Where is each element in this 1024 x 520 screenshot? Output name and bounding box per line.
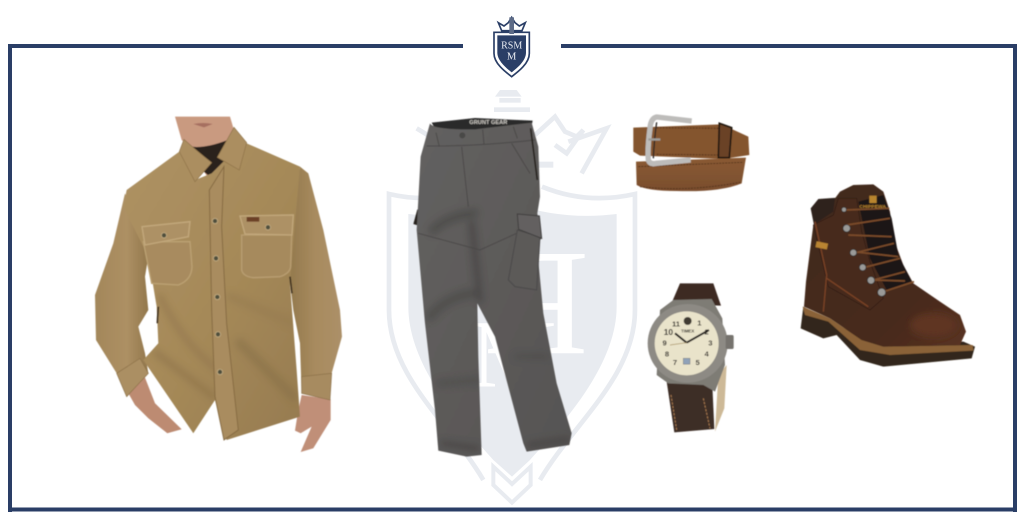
pants silhouette	[417, 123, 572, 457]
neck and chin	[175, 117, 237, 178]
dial	[655, 311, 719, 375]
collar right	[217, 127, 247, 170]
arm shadow lines	[157, 277, 292, 323]
right sleeve	[289, 167, 342, 400]
watermark tip chevron	[493, 467, 531, 503]
boot welt	[803, 307, 973, 355]
pants inner waistband	[432, 118, 533, 132]
buttons	[161, 218, 271, 375]
dial text and numbers: 8	[665, 350, 670, 359]
collar shadow	[187, 137, 237, 178]
dial text and numbers: 10	[664, 327, 673, 337]
right chest pocket	[242, 235, 292, 278]
boot sole	[801, 307, 975, 367]
boot upper	[804, 184, 966, 347]
dial text and numbers: 4	[705, 350, 710, 359]
boot tongue	[858, 195, 912, 290]
lower strap lining	[715, 365, 727, 432]
watch hands	[675, 330, 709, 343]
left hand	[128, 373, 182, 433]
logo: crest with crown and monogram	[494, 17, 529, 77]
side pocket opening	[531, 128, 537, 180]
strap stitching	[671, 395, 710, 430]
left cuff	[117, 358, 148, 397]
panel stitching	[815, 222, 868, 312]
boot brand mark	[859, 196, 886, 210]
lower strap	[636, 158, 746, 191]
logo monogram: RSM	[501, 41, 522, 52]
wrist watch	[648, 283, 734, 432]
left chest pocket	[143, 242, 192, 285]
dial logo	[684, 317, 692, 325]
logo shield	[494, 32, 529, 77]
dial text and numbers: 11	[672, 320, 681, 329]
boot brand mark: CHIPPEWA	[859, 204, 886, 210]
watermark shield fill	[408, 203, 617, 477]
belt stitching	[638, 128, 743, 189]
crown knob	[726, 335, 734, 349]
watermark: large crest	[389, 90, 635, 503]
watermark crown	[417, 117, 607, 173]
eyelets	[842, 207, 886, 296]
toe highlight	[910, 313, 957, 337]
belt	[633, 117, 749, 191]
eyelet panel	[813, 198, 883, 310]
pocket tag	[247, 217, 259, 222]
dial text and numbers: 1	[697, 319, 702, 328]
shirt with hands	[95, 117, 342, 452]
dial text and numbers: 3	[708, 339, 712, 348]
collar left	[179, 139, 212, 182]
shirt body	[123, 143, 300, 440]
logo: crest with crown and monogram: M	[507, 51, 517, 62]
dial text and numbers: 5	[696, 358, 701, 367]
dial text and numbers: 7	[673, 358, 677, 367]
watch lugs	[657, 299, 725, 392]
dial text and numbers: 9	[663, 339, 667, 348]
placket	[209, 167, 238, 440]
buckle prong	[648, 138, 660, 141]
right hand	[295, 395, 331, 452]
boot collar padding	[811, 198, 838, 225]
dial text and numbers	[663, 319, 712, 367]
side tag	[815, 241, 828, 250]
dial text and numbers: 2	[705, 327, 709, 336]
brand label: GRUNT GEAR	[469, 120, 507, 126]
watermark sword top	[494, 90, 553, 168]
shirt shading	[157, 297, 293, 397]
cargo pants	[413, 118, 572, 457]
pants shading	[430, 213, 567, 448]
upper strap	[671, 283, 721, 306]
cargo pocket	[508, 230, 540, 290]
logo crown	[498, 17, 525, 31]
waist button	[459, 132, 465, 138]
left sleeve	[95, 193, 148, 397]
right cuff	[302, 373, 332, 400]
watermark monogram: R	[488, 218, 589, 386]
date window	[683, 358, 690, 364]
logo sword hilt	[509, 17, 514, 34]
watch case	[648, 304, 728, 383]
work boot	[801, 184, 975, 367]
laces	[845, 208, 914, 292]
waistband and fly	[418, 127, 535, 250]
belt keeper	[718, 123, 732, 158]
watermark monogram: M	[471, 301, 557, 408]
watermark shield outline	[389, 187, 635, 480]
cargo pocket flap	[517, 214, 542, 238]
lower strap	[667, 382, 714, 432]
belt buckle	[648, 117, 692, 164]
upper strap	[633, 124, 749, 159]
dial text and numbers: TIMEX	[681, 328, 694, 333]
side cargo flap left	[413, 209, 423, 227]
